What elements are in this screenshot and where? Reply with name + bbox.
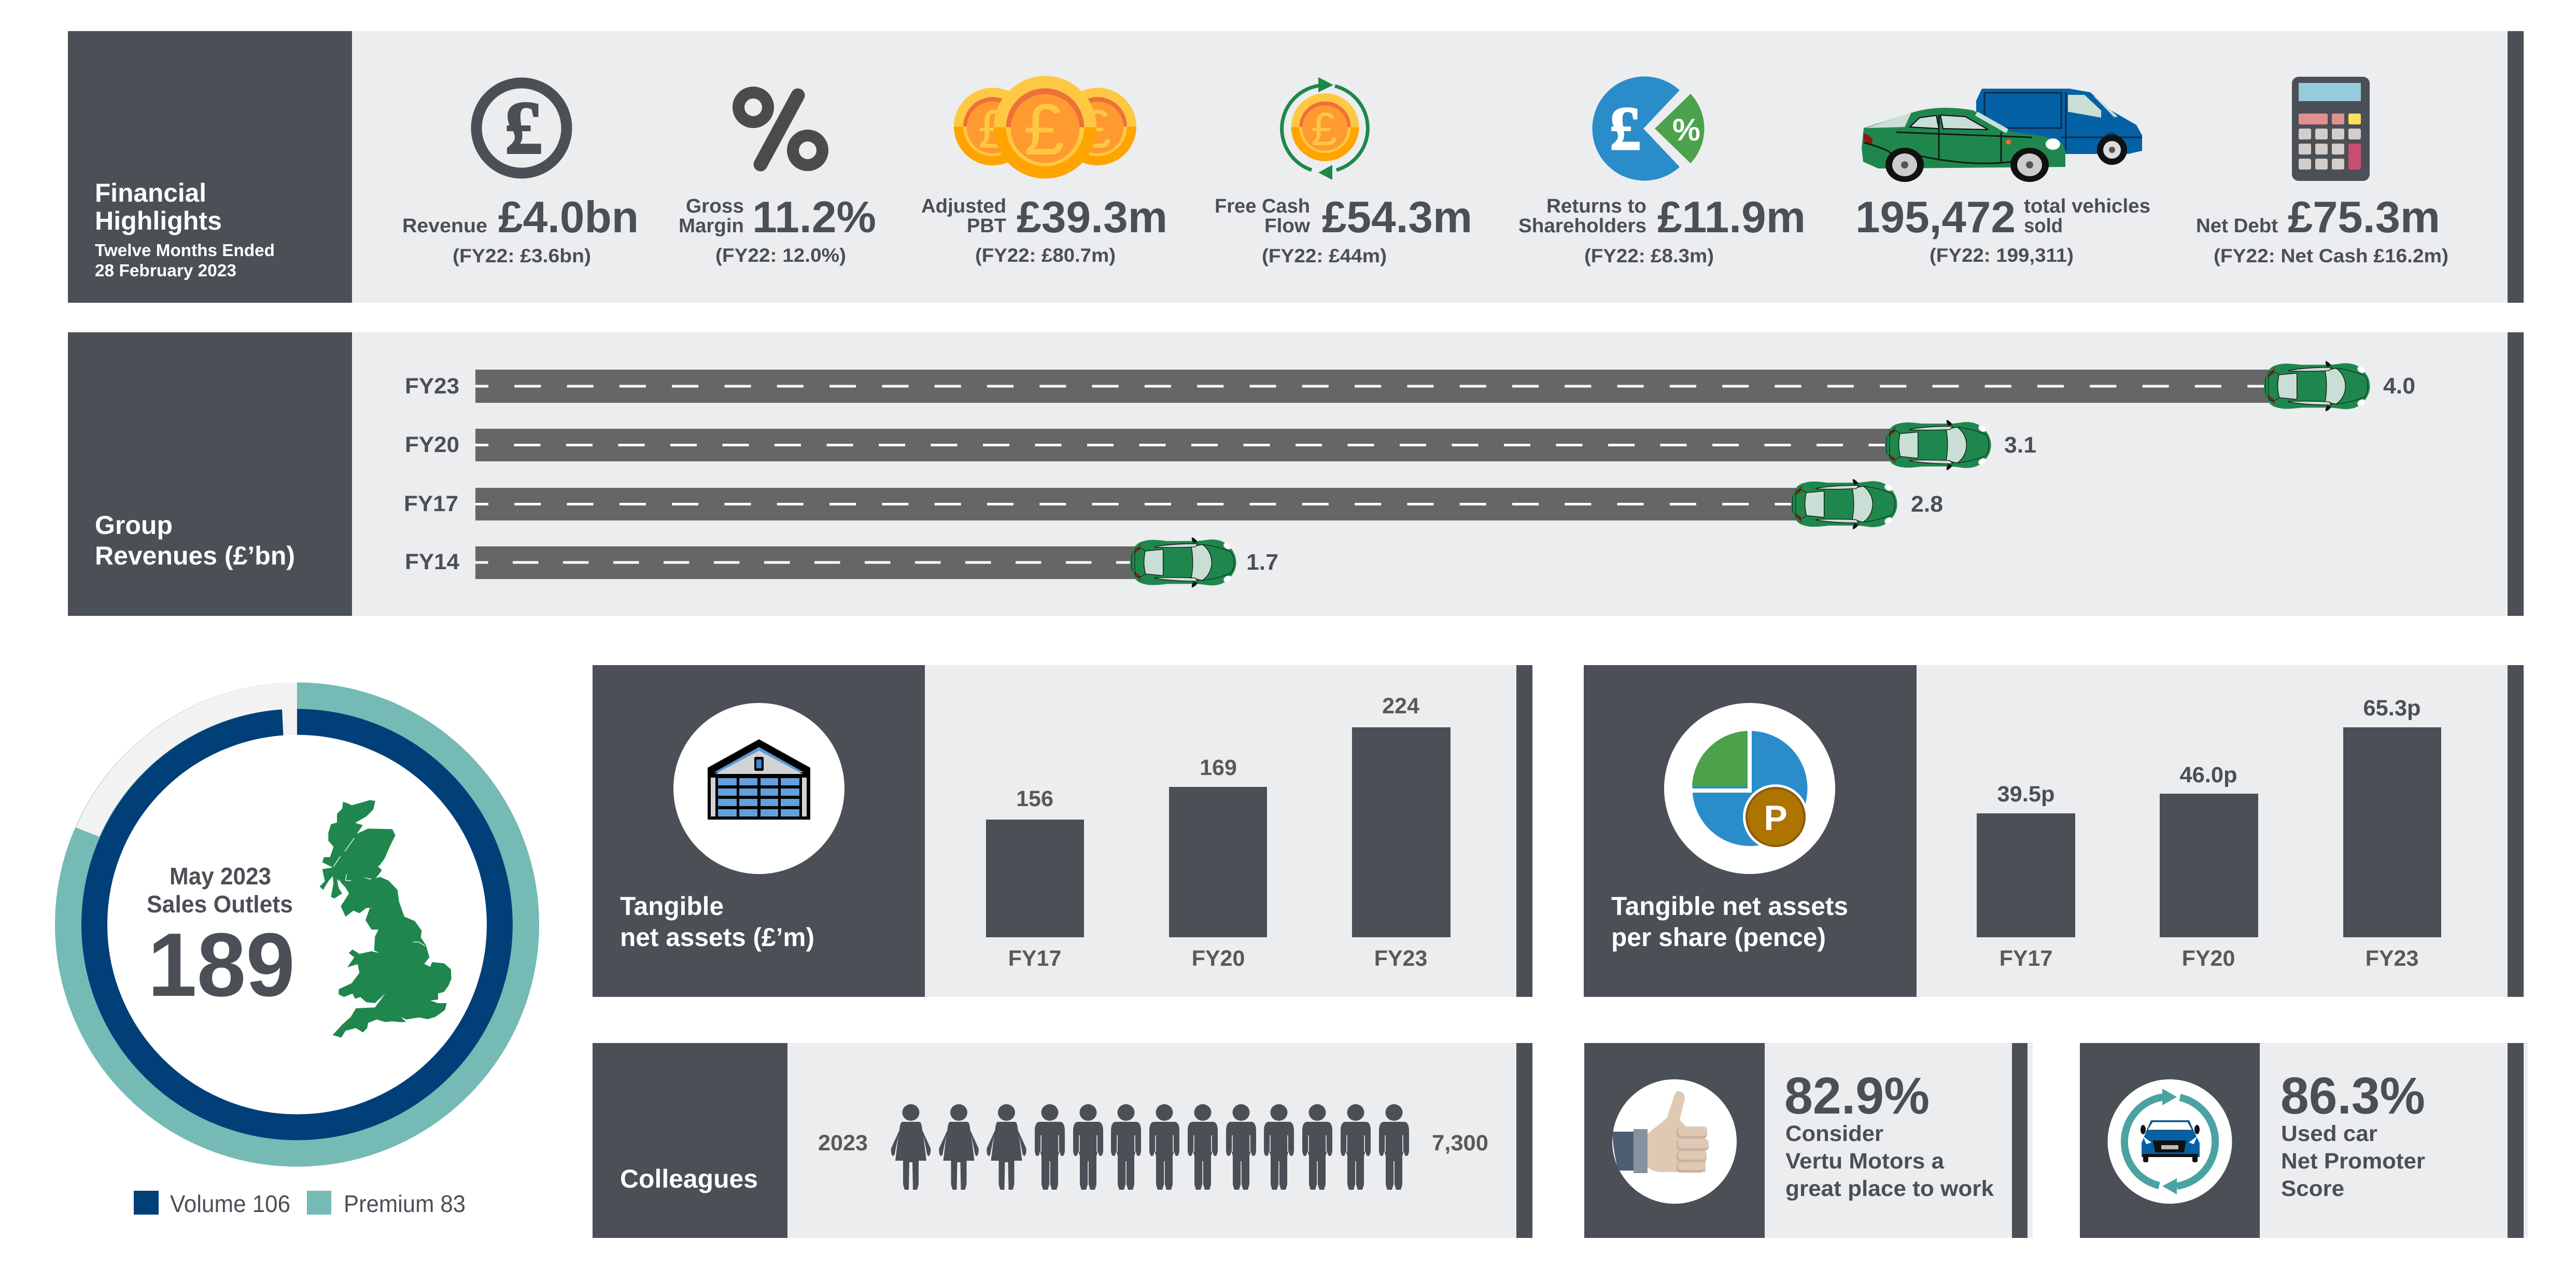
- road: FY20 3.1: [405, 420, 2036, 470]
- icon: calculator: [2292, 77, 2370, 181]
- sidebar: thumbs up: [1584, 1043, 1765, 1238]
- sidebar: per share heading: per share (pence): [1611, 923, 1826, 952]
- text: net promoter description: Used car: [2281, 1121, 2377, 1146]
- sidebar: per share heading: [1584, 665, 1917, 997]
- panel: net promoter score: [2080, 1043, 2528, 1238]
- sidebar: financial highlights heading: Highlights: [95, 206, 222, 235]
- sidebar: financial highlights heading: Financial: [95, 178, 206, 207]
- kpi: revenue: [402, 83, 639, 266]
- text: 82.9%: 82.9%: [1784, 1067, 1930, 1125]
- icon: coin with circular arrows: [1282, 77, 1368, 180]
- kpi: adjusted PBT: [921, 76, 1167, 266]
- road: FY20 3.1: 3.1: [2004, 432, 2036, 458]
- text: great place to work description: Vertu Motors a: [1785, 1149, 1945, 1174]
- kpi: revenue: Revenue: [402, 215, 487, 237]
- kpi: returns to shareholders: [1518, 76, 1806, 266]
- road: FY17 2.8: 2.8: [1911, 491, 1943, 517]
- text: great place to work description: great place to work: [1785, 1176, 1994, 1201]
- icon: pie with penny coin: P: [1764, 798, 1787, 838]
- sidebar: financial highlights heading: Twelve Months Ended: [95, 241, 275, 260]
- icon: circular arrows: [2124, 1089, 2215, 1194]
- kpi: net debt: £75.3m: [2288, 193, 2440, 242]
- kpi: gross margin: [679, 92, 876, 266]
- road: FY23 4.0: [405, 361, 2415, 412]
- kpi: free cash flow: [1215, 77, 1472, 266]
- bar chart: tangible net assets: FY20: [1192, 946, 1245, 971]
- icon: thumbs up: [1612, 1091, 1709, 1173]
- icon: van and car: [1862, 89, 2142, 182]
- kpi: net debt: Net Debt: [2196, 215, 2278, 237]
- icon: coins: £: [1024, 89, 1064, 170]
- kpi: gross margin: Gross: [686, 195, 744, 217]
- bar chart: per share: FY20: [2182, 946, 2235, 971]
- sidebar: per share heading: Tangible net assets: [1611, 892, 1848, 921]
- road: FY17 2.8: FY17: [404, 491, 458, 516]
- panel: tangible net assets: [593, 665, 1532, 997]
- bar chart: per share: 46.0p: [2179, 763, 2237, 787]
- text: Sales Outlets: Sales Outlets: [147, 891, 293, 918]
- kpi: gross margin: 11.2%: [752, 193, 876, 242]
- sidebar: tangible net assets heading: net assets (£’m): [620, 923, 814, 952]
- icon: pie with pound and percent: [1592, 76, 1704, 181]
- text: 86.3%: 86.3%: [2281, 1067, 2425, 1125]
- sidebar: group revenues heading: Group: [95, 511, 173, 540]
- bar chart: tangible net assets: 156: [1016, 786, 1053, 811]
- kpi: adjusted PBT: (FY22: £80.7m): [975, 245, 1116, 266]
- kpi: returns to shareholders: £11.9m: [1657, 193, 1806, 242]
- kpi: adjusted PBT: £39.3m: [1017, 193, 1167, 242]
- sidebar: tangible net assets heading: Tangible: [620, 892, 724, 921]
- icon: pie with penny coin: [1690, 728, 1808, 850]
- bar chart: tangible net assets: [986, 694, 1451, 971]
- icon: car front: [2141, 1120, 2200, 1162]
- text: May 2023: May 2023: [170, 863, 271, 890]
- donut: gap in volume ring: [282, 708, 297, 735]
- icon: pound circle: [476, 83, 567, 173]
- text: 7,300: 7,300: [1432, 1131, 1488, 1156]
- icon: percent: [738, 92, 822, 165]
- legend: volume: Volume 106: [170, 1190, 290, 1217]
- kpi: adjusted PBT: Adjusted: [921, 195, 1006, 217]
- text: 2023: 2023: [818, 1131, 868, 1156]
- road: FY14 1.7: 1.7: [1246, 550, 1278, 575]
- bar chart: tangible net assets: 224: [1382, 694, 1419, 718]
- kpi: returns to shareholders: (FY22: £8.3m): [1584, 245, 1714, 266]
- road: FY23 4.0: 4.0: [2383, 373, 2415, 399]
- kpi: gross margin: Margin: [679, 215, 744, 237]
- kpi: returns to shareholders: Returns to: [1546, 195, 1646, 217]
- text: great place to work description: Consider: [1785, 1121, 1883, 1146]
- text: net promoter description: Score: [2281, 1176, 2344, 1201]
- icon: UK map: [320, 800, 452, 1038]
- kpi: gross margin: (FY22: 12.0%): [715, 245, 846, 266]
- bar chart: tangible net assets: FY17: [1008, 946, 1061, 971]
- icon: pound circle: £: [505, 87, 542, 170]
- text: net promoter description: [2281, 1121, 2425, 1201]
- panel: tangible net assets per share: [1584, 665, 2524, 997]
- panel: financial highlights: [68, 31, 2524, 303]
- kpi: revenue: (FY22: £3.6bn): [453, 245, 591, 266]
- road: FY20 3.1: FY20: [405, 432, 459, 457]
- sidebar: group revenues heading: [68, 332, 352, 616]
- icon: coins: £: [1081, 99, 1111, 160]
- donut: remainder of outer ring: [76, 682, 297, 837]
- chart: sales outlets donut: [68, 682, 526, 1217]
- road: FY14 1.7: [405, 537, 1278, 588]
- kpi: revenue: £4.0bn: [498, 193, 639, 242]
- kpi: net debt: [2196, 77, 2448, 266]
- kpi: free cash flow: (FY22: £44m): [1262, 245, 1387, 266]
- pictogram: people: [891, 1104, 1409, 1190]
- sidebar: tangible net assets heading: [593, 665, 925, 997]
- text: great place to work description: [1785, 1121, 1994, 1201]
- road: FY17 2.8: [404, 479, 1943, 529]
- bar chart: per share: [1977, 696, 2441, 971]
- kpi: returns to shareholders: Shareholders: [1518, 215, 1646, 237]
- donut: volume ring: [94, 722, 500, 1127]
- sidebar: colleagues heading: Colleagues: [620, 1164, 758, 1193]
- sidebar: financial highlights heading: [68, 31, 352, 303]
- text: 189: 189: [148, 914, 295, 1015]
- panel: colleagues: [593, 1043, 1532, 1238]
- kpi: net debt: (FY22: Net Cash £16.2m): [2214, 245, 2448, 266]
- kpi: total vehicles sold: 195,472: [1855, 193, 2016, 242]
- sidebar: financial highlights heading: 28 February 2023: [95, 261, 236, 280]
- kpi: total vehicles sold: [1855, 89, 2150, 266]
- icon: coins: [954, 76, 1136, 179]
- bar chart: per share: 65.3p: [2363, 696, 2421, 721]
- kpi: total vehicles sold: (FY22: 199,311): [1930, 245, 2074, 266]
- kpi: adjusted PBT: PBT: [967, 215, 1006, 237]
- text: net promoter description: Net Promoter: [2281, 1149, 2425, 1174]
- road: FY23 4.0: FY23: [405, 374, 459, 399]
- panel: great place to work: [1584, 1043, 2033, 1238]
- icon: coin with circular arrows: £: [1311, 104, 1337, 156]
- kpi: free cash flow: Free Cash: [1215, 195, 1310, 217]
- bar chart: per share: FY17: [2000, 946, 2052, 971]
- icon: coins: £: [978, 99, 1008, 160]
- kpi: total vehicles sold: sold: [2024, 215, 2063, 237]
- bar chart: per share: FY23: [2366, 946, 2418, 971]
- kpi: free cash flow: £54.3m: [1322, 193, 1472, 242]
- icon: pie with pound and percent: £: [1610, 94, 1641, 163]
- road: FY14 1.7: FY14: [405, 550, 459, 574]
- legend: premium: Premium 83: [344, 1190, 466, 1217]
- icon: pie with pound and percent: %: [1672, 112, 1700, 147]
- kpi: free cash flow: Flow: [1264, 215, 1310, 237]
- sidebar: colleagues heading: [593, 1043, 787, 1238]
- icon: green car: [1862, 108, 2065, 182]
- bar chart: per share: 39.5p: [1997, 782, 2055, 807]
- kpi: total vehicles sold: total vehicles: [2024, 195, 2150, 217]
- sidebar: used car icon: [2080, 1043, 2260, 1238]
- icon: garage: [708, 739, 810, 820]
- bar chart: tangible net assets: 169: [1200, 755, 1237, 780]
- donut: premium ring: [68, 696, 526, 1153]
- sidebar: group revenues heading: Revenues (£’bn): [95, 541, 295, 570]
- icon: blue van: [1976, 89, 2142, 165]
- panel: group revenues: [68, 332, 2524, 616]
- bar chart: tangible net assets: FY23: [1374, 946, 1427, 971]
